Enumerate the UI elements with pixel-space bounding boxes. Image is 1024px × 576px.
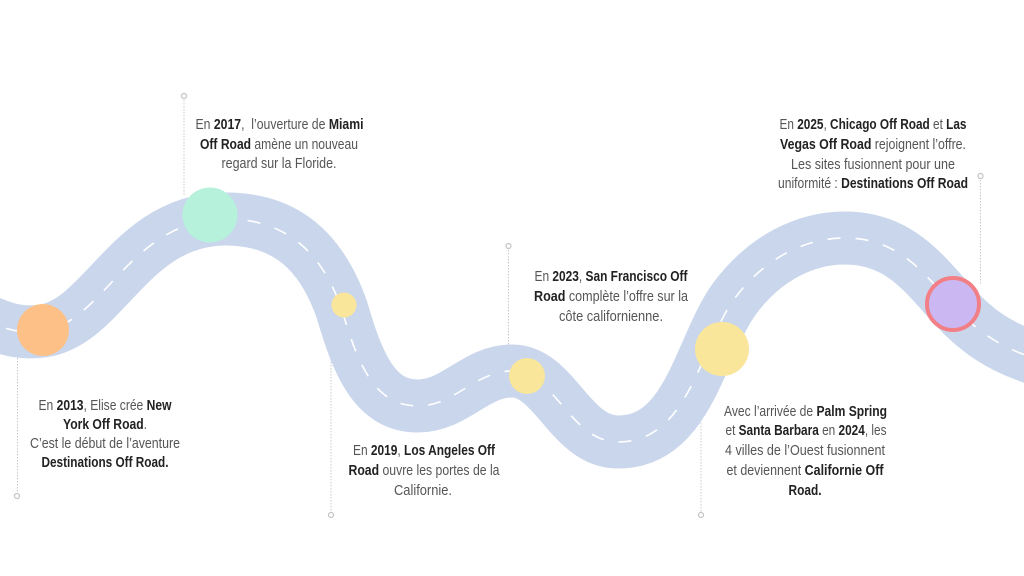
text: 2024: Avec l’arrivée de Palm Spring — [724, 404, 887, 420]
text: 2013: C’est le début de l’aventure — [30, 436, 180, 452]
winding road — [0, 219, 1024, 442]
text: 2013: En 2013, Elise crée New — [38, 398, 172, 414]
text: 2025: Les sites fusionnent pour une — [791, 157, 955, 173]
milestone 2024 dot — [695, 322, 749, 376]
text: 2019: Road ouvre les portes de la — [348, 463, 500, 479]
milestone 2025 dot — [927, 278, 979, 330]
text: 2017 — [196, 117, 364, 172]
connector lines — [14, 94, 983, 518]
text: 2019: Californie. — [394, 483, 452, 499]
milestone 2013 dot — [17, 304, 69, 356]
milestone 2017 dot — [182, 188, 238, 242]
text: 2025: uniformité : Destinations Off Road — [778, 176, 968, 192]
text: 2023: côte californienne. — [559, 309, 663, 325]
text: 2025 — [778, 117, 968, 192]
milestone 2023 dot — [509, 358, 545, 394]
text: 2017: Off Road amène un nouveau — [200, 137, 358, 153]
text: 2017: En 2017, l’ouverture de Miami — [196, 117, 364, 133]
text: 2019: En 2019, Los Angeles Off — [353, 443, 495, 459]
text: 2024: 4 villes de l’Ouest fusionnent — [725, 443, 885, 459]
text: 2023 — [534, 269, 689, 325]
text: 2019 — [348, 443, 500, 499]
text: 2013 — [30, 398, 180, 471]
text: 2025: En 2025, Chicago Off Road et Las — [779, 117, 966, 133]
text: 2017: regard sur la Floride. — [222, 156, 336, 172]
text: 2013: Destinations Off Road. — [42, 455, 168, 471]
text: 2024: et deviennent Californie Off — [726, 463, 884, 479]
text: 2024 — [724, 404, 887, 499]
text: 2023: Road complète l’offre sur la — [534, 289, 689, 305]
text: 2013: York Off Road. — [63, 417, 147, 433]
text: 2024: Road. — [788, 483, 822, 499]
text: 2023: En 2023, San Francisco Off — [534, 269, 688, 285]
text: 2024: et Santa Barbara en 2024, les — [726, 423, 886, 439]
milestone 2019 dot — [332, 292, 356, 318]
text: 2025: Vegas Off Road rejoignent l’offre. — [780, 137, 966, 153]
